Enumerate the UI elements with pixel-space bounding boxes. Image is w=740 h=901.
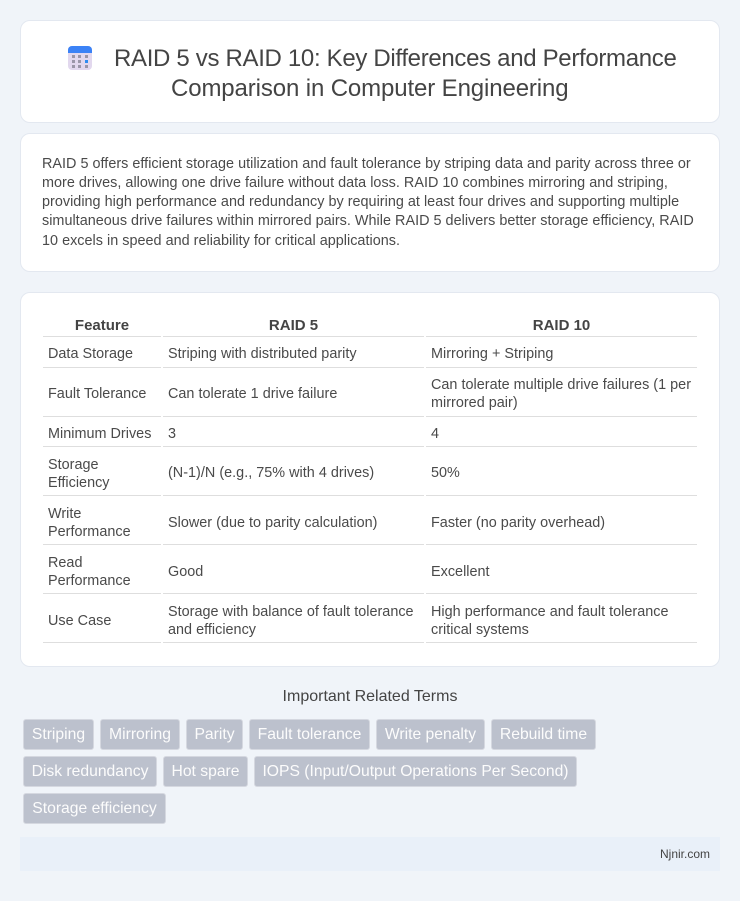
row: storage efficiency: Storage (48, 457, 99, 473)
heading: important related terms: Important Related Terms (283, 688, 457, 705)
table header: Feature (75, 317, 129, 334)
summary text: RAID 5 offers efficient storage utilization and fault tolerance by striping data and parity across three or (42, 156, 691, 172)
row: read performance (48, 555, 490, 589)
summary text: more drives, allowing one drive failure without data loss. RAID 10 combines mirroring and striping, (42, 175, 668, 191)
tag (100, 719, 180, 750)
row: use case: Use Case (48, 613, 111, 629)
footer credit: Njnir.com (660, 847, 710, 861)
row: write performance: Write (48, 506, 81, 522)
tag: Rebuild time (500, 726, 587, 743)
row: minimum drives: 3 (168, 426, 176, 442)
row: read performance: Performance (48, 573, 131, 589)
tag (491, 719, 596, 750)
panel: summary card (20, 133, 720, 272)
tag (23, 756, 157, 787)
row: write performance: Performance (48, 524, 131, 540)
tag (254, 756, 577, 787)
tag: Disk redundancy (32, 763, 148, 780)
row: storage efficiency: Efficiency (48, 475, 110, 491)
row: minimum drives (48, 426, 439, 442)
panel: title card (20, 20, 720, 123)
tag: Fault tolerance (258, 726, 361, 743)
row: read performance: Good (168, 564, 203, 580)
panel: comparison table card (20, 292, 720, 667)
row: use case: critical systems (431, 622, 529, 638)
title line 2: Comparison in Computer Engineering (171, 75, 568, 102)
row: data storage: Mirroring + Striping (431, 346, 553, 362)
table header (75, 317, 590, 334)
comparison table (43, 317, 697, 643)
row: use case: High performance and fault tolerance (431, 604, 669, 620)
tag (376, 719, 485, 750)
row: minimum drives: 4 (431, 426, 439, 442)
tag: Hot spare (171, 763, 240, 780)
row: data storage: Data Storage (48, 346, 133, 362)
title line 1: RAID 5 vs RAID 10: Key Differences and Performance (114, 45, 676, 72)
tags (23, 719, 596, 824)
summary text: simultaneous drive failures within mirrored pairs. While RAID 5 delivers better storage efficiency, RAID (42, 213, 694, 229)
row: data storage: Striping with distributed parity (168, 346, 357, 362)
row: fault tolerance: Fault Tolerance (48, 386, 146, 402)
row: read performance: Read (48, 555, 82, 571)
summary text: providing high performance and redundancy by requiring at least four drives and supporting multiple (42, 194, 679, 210)
table header: RAID 5 (269, 317, 318, 334)
row: write performance: Slower (due to parity calculation) (168, 515, 377, 531)
row: write performance (48, 506, 605, 540)
tag (186, 719, 243, 750)
tag (249, 719, 370, 750)
row: use case (48, 604, 669, 638)
tag: Mirroring (109, 726, 171, 743)
row: minimum drives: Minimum Drives (48, 426, 151, 442)
row: use case: Storage with balance of fault tolerance (168, 604, 414, 620)
row: use case: and efficiency (168, 622, 256, 638)
row: fault tolerance: mirrored pair) (431, 395, 518, 411)
tag (163, 756, 248, 787)
tag: Striping (32, 726, 85, 743)
row: write performance: Faster (no parity overhead) (431, 515, 605, 531)
summary text (42, 156, 694, 249)
icon: calendar (68, 46, 92, 70)
row: data storage (48, 346, 553, 362)
footer bar (20, 837, 720, 871)
tag (23, 719, 94, 750)
summary text: 10 excels in speed and reliability for critical applications. (42, 233, 400, 249)
tag: Parity (194, 726, 235, 743)
row: storage efficiency: (N-1)/N (e.g., 75% with 4 drives) (168, 465, 374, 481)
tag: Write penalty (385, 726, 476, 743)
table header: RAID 10 (533, 317, 590, 334)
tag: Storage efficiency (32, 800, 157, 817)
row: fault tolerance (48, 377, 691, 411)
tag (23, 793, 166, 824)
row: storage efficiency: 50% (431, 465, 460, 481)
row: read performance: Excellent (431, 564, 490, 580)
tag: IOPS (Input/Output Operations Per Second) (262, 763, 569, 780)
row: storage efficiency (48, 457, 460, 491)
row: fault tolerance: Can tolerate 1 drive failure (168, 386, 337, 402)
row: fault tolerance: Can tolerate multiple drive failures (1 per (431, 377, 691, 393)
